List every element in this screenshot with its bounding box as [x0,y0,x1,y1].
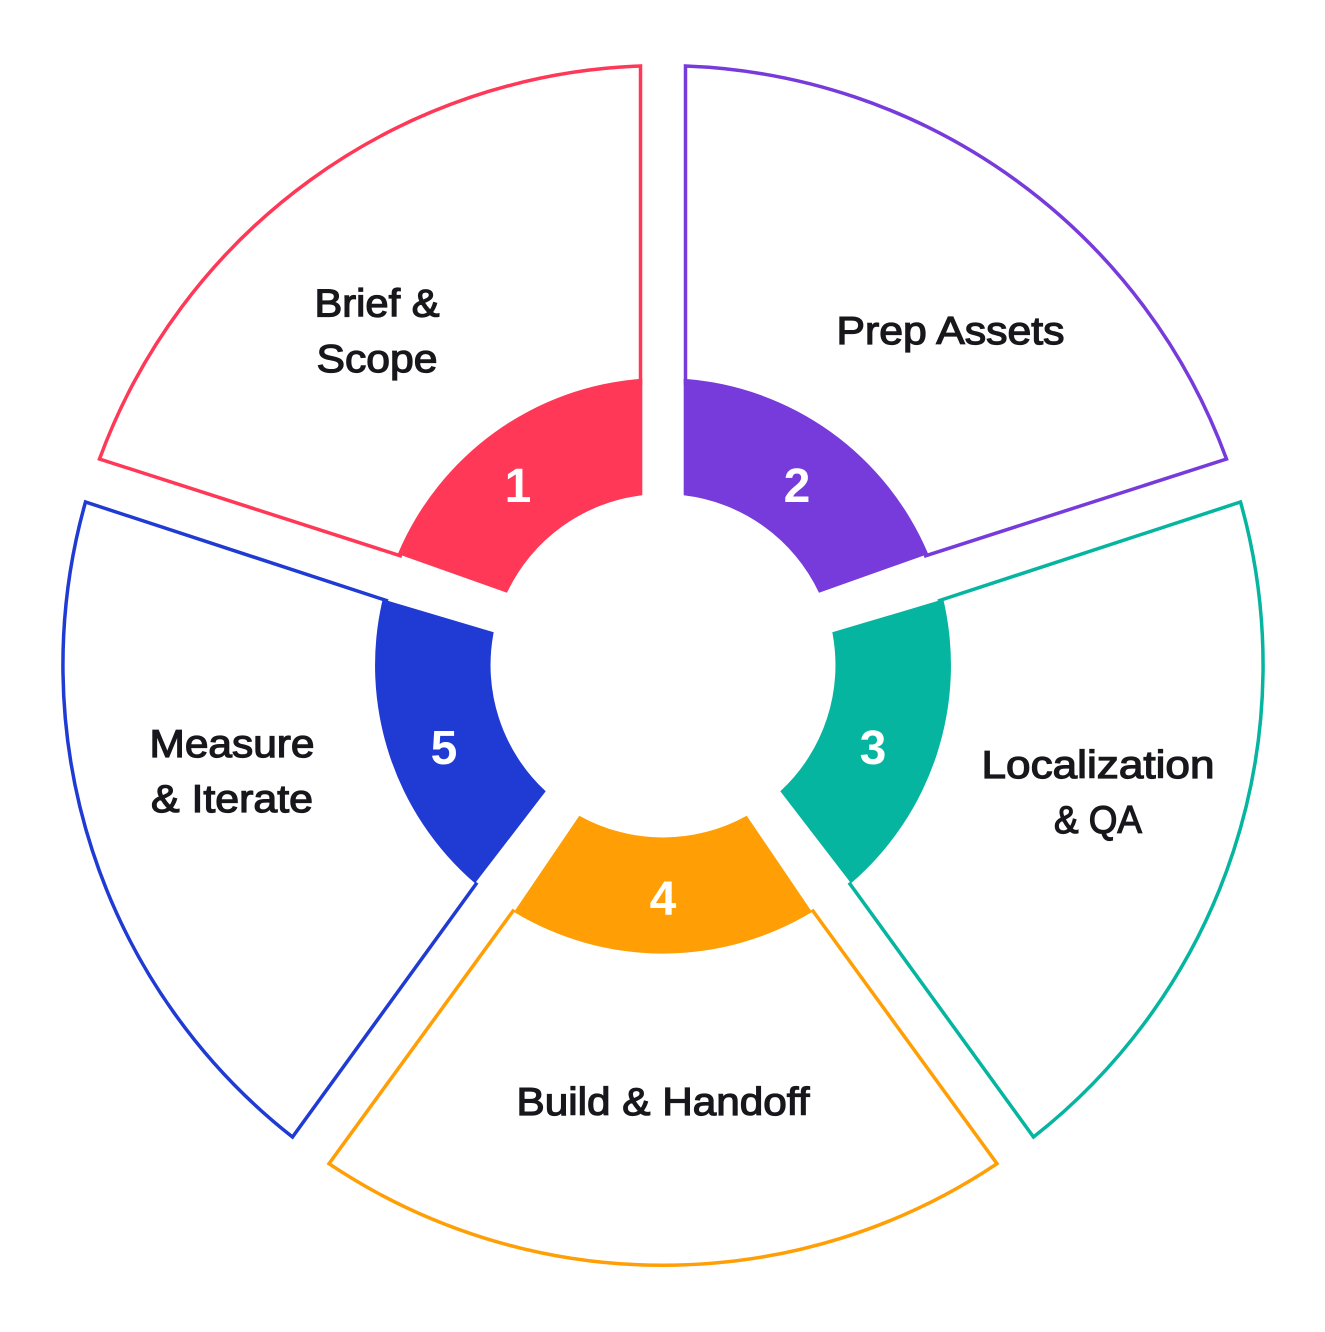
segment 1: Brief & Scope [100,66,642,593]
segment 4: Build & Handoff: 4 [650,873,677,926]
segment 2: Prep Assets [684,66,1226,593]
segment 4: Build & Handoff [329,816,997,1265]
segment 5: Measure & Iterate: 5 [431,722,457,775]
segment 5: Measure & Iterate: & Iterate [151,778,313,821]
segment 1: Brief & Scope: Scope [316,338,438,381]
segment 3: Localization & QA: & QA [1054,799,1142,842]
segment 5: Measure & Iterate: Measure [150,723,314,766]
segment 1: Brief & Scope: 1 [505,460,531,513]
segment 3: Localization & QA: Localization [982,744,1214,787]
segment 5: Measure & Iterate [63,502,546,1137]
segment 1: Brief & Scope: Brief & [314,282,440,326]
segment 2: Prep Assets: Prep Assets [836,310,1064,353]
segment 4: Build & Handoff: Build & Handoff [516,1081,810,1124]
segment 3: Localization & QA: 3 [860,722,886,775]
segment 3: Localization & QA [780,502,1263,1137]
segment 2: Prep Assets: 2 [784,460,810,513]
